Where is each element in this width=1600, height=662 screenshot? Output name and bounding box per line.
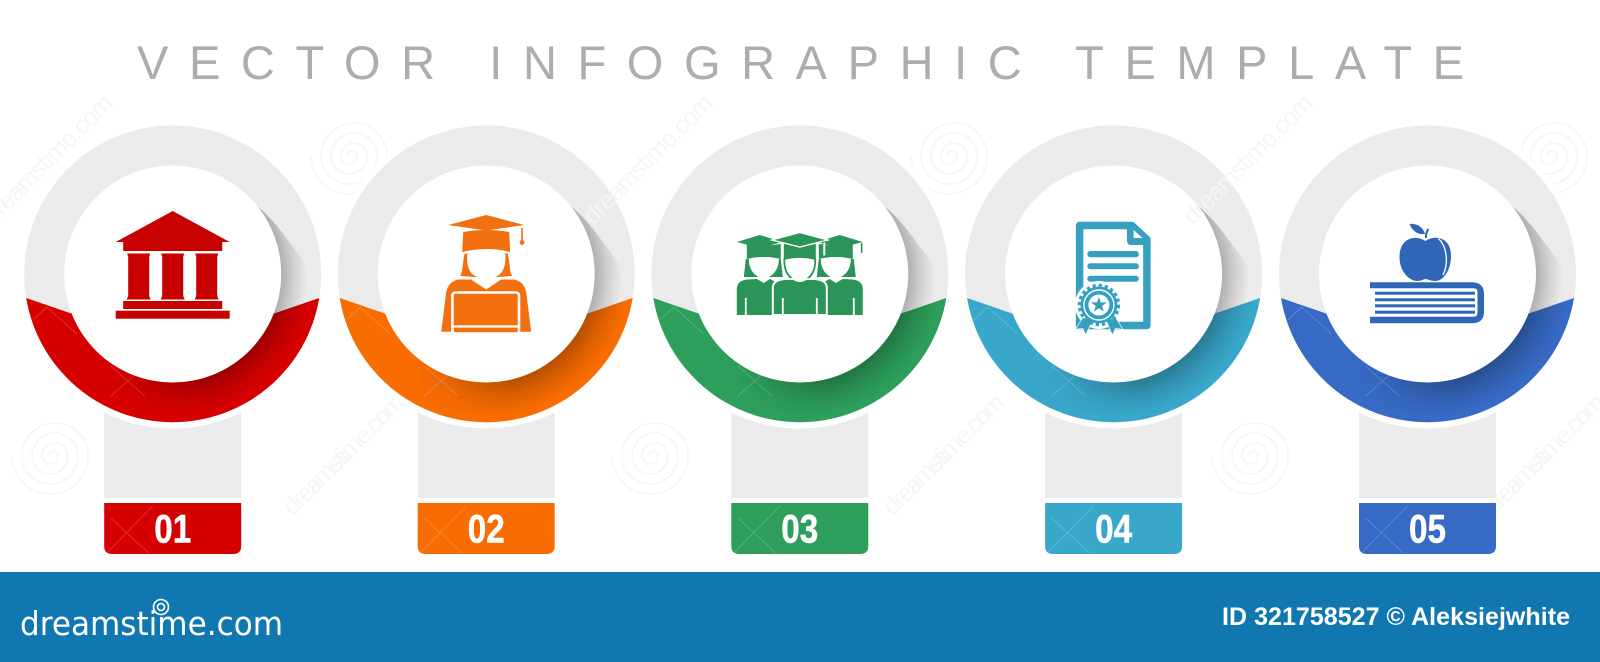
coloured ribbon — [340, 298, 633, 422]
number badge — [731, 503, 868, 554]
label slot — [1359, 394, 1496, 498]
number: 04 — [1095, 508, 1133, 552]
coloured ribbon — [26, 298, 319, 422]
number: 01 — [154, 508, 191, 552]
grey ring — [651, 126, 948, 422]
footer logo text: dreamstime.com — [20, 604, 283, 643]
ring shadow — [885, 207, 947, 316]
number: 05 — [1409, 508, 1446, 552]
footer bar — [0, 572, 1600, 662]
title: VECTOR INFOGRAPHIC TEMPLATE — [137, 36, 1488, 89]
icon: graduate with laptop — [441, 215, 531, 334]
watermark lower diagonal text — [277, 388, 1600, 521]
watermark lower diagonal text: dreamstime.com — [277, 388, 410, 521]
icon: bank building — [116, 211, 230, 319]
watermark upper diagonal text: dreamstime.com — [577, 89, 719, 230]
ring shadow — [258, 207, 320, 316]
ring shadow — [1513, 207, 1574, 316]
number: 02 — [468, 508, 505, 552]
grey ring — [965, 126, 1262, 422]
icon: apple on a book — [1370, 224, 1484, 323]
ring shadow — [1199, 207, 1261, 316]
number: 03 — [781, 508, 818, 552]
grey ring — [24, 126, 321, 422]
number badge — [418, 503, 555, 554]
image credit: ID 321758527 © Aleksiejwhite — [1222, 603, 1570, 631]
coloured ribbon — [1281, 298, 1574, 422]
ring shadow — [572, 207, 633, 316]
logo spiral — [154, 600, 168, 614]
number badge — [1359, 503, 1496, 554]
panel: step 03 group of graduates — [645, 120, 954, 554]
grey ring — [1279, 126, 1576, 422]
watermark upper diagonal text — [0, 89, 1319, 230]
middle graduate — [772, 232, 828, 315]
number badge — [1045, 503, 1182, 554]
icon: three graduates — [737, 232, 863, 315]
watermark spirals — [12, 123, 1587, 494]
label slot — [1045, 394, 1182, 498]
watermark upper diagonal text: dreamstime.com — [1177, 89, 1319, 230]
label slot — [731, 394, 868, 498]
icon: certificate — [1075, 222, 1151, 335]
coloured ribbon — [653, 298, 946, 422]
grey ring — [338, 126, 635, 422]
watermark lower diagonal text: dreamstime.com — [877, 388, 1010, 521]
panel: step 04 certificate — [959, 120, 1268, 554]
label slot — [104, 394, 241, 498]
panel: step 02 graduate with laptop — [332, 120, 641, 554]
panel: step 01 bank — [18, 120, 327, 554]
number badge — [104, 503, 241, 554]
label slot — [418, 394, 555, 498]
right graduate — [817, 235, 863, 315]
panel: step 05 apple on book — [1273, 120, 1582, 554]
left graduate — [737, 235, 783, 315]
coloured ribbon — [967, 298, 1260, 422]
